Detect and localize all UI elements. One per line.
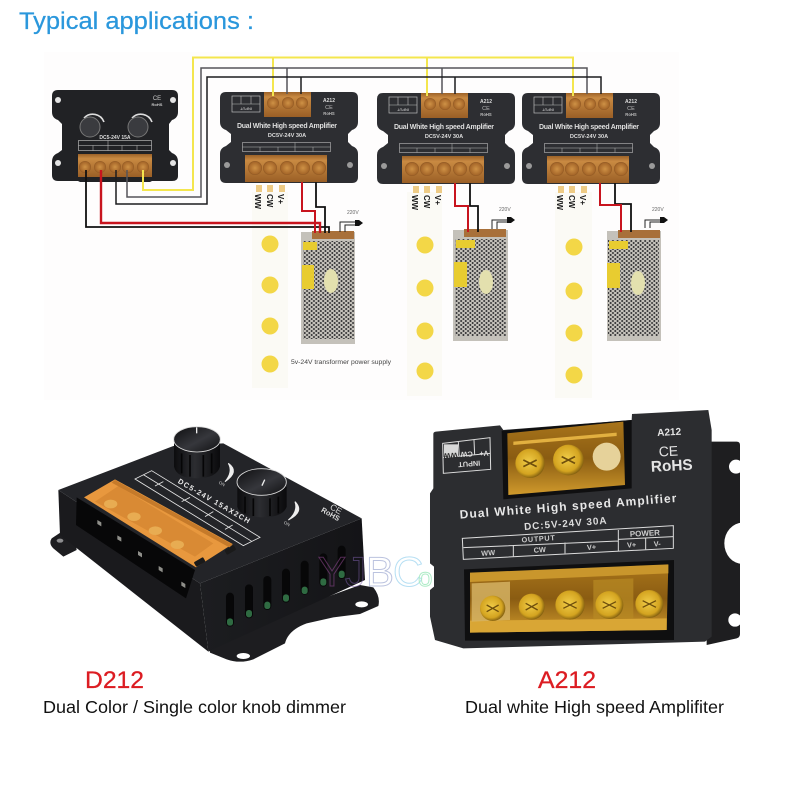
A212 amplifier 1: RoHS <box>323 111 335 116</box>
right mounting flange <box>707 442 761 645</box>
power wires <box>86 170 631 233</box>
D212 dimmer, small: RoHS <box>152 102 163 107</box>
power supply label: 5v-24V transformer power supply <box>291 359 392 366</box>
power supply 1: 220V <box>347 210 359 216</box>
A212 amplifier 1: DC5V-24V 30A <box>268 133 306 139</box>
rating marks <box>218 463 344 527</box>
model and marks: CE <box>658 443 679 460</box>
output and power table: V+ <box>587 542 596 552</box>
rating marks: CE <box>328 502 344 517</box>
voltage rating: DC:5V-24V 30A <box>524 516 607 533</box>
wiring diagram <box>44 52 679 400</box>
knob 1 <box>174 427 220 478</box>
LED strip 3 <box>555 192 592 398</box>
watermark: J <box>345 548 366 595</box>
model and marks: RoHS <box>650 457 693 476</box>
output and power table: OUTPUT <box>521 533 556 544</box>
watermark: ° <box>436 546 445 571</box>
A212 caption: Dual white High speed Amplifiter <box>465 697 724 717</box>
output terminal recess <box>464 560 674 641</box>
model and marks: A212 <box>657 427 682 439</box>
spec table <box>135 471 260 546</box>
rating marks: RoHS <box>320 505 342 523</box>
output and power table: V+ <box>627 540 636 550</box>
A212 amplifier 3: RoHS <box>625 112 637 117</box>
terminal block <box>76 497 195 598</box>
right face <box>200 518 365 652</box>
LED strip 2 <box>407 192 442 396</box>
A212 amplifier 3: INPUT <box>541 108 554 112</box>
body <box>430 410 712 648</box>
A212 amplifier 2 <box>377 93 515 211</box>
A212 amplifier 2: RoHS <box>480 112 492 117</box>
watermark: o <box>418 562 432 592</box>
A212 amplifier 2: A212 <box>480 99 492 105</box>
output and power table: V- <box>654 539 661 549</box>
A212 amplifier 3: WW <box>555 195 564 211</box>
output and power table: WW <box>481 548 495 558</box>
power supply 1 <box>301 210 363 344</box>
A212 amplifier 1: CE <box>325 105 333 111</box>
A212 amplifier 2: INPUT <box>396 108 409 112</box>
watermark: C <box>393 548 423 595</box>
input table: WW <box>443 451 458 460</box>
A212 amplifier 1: A212 <box>323 98 335 104</box>
power supply 2: 220V <box>499 207 511 213</box>
panel background <box>44 52 679 400</box>
watermark: Y <box>318 548 346 595</box>
input terminal recess <box>502 420 632 499</box>
A212 amplifier 2: Dual White High speed Amplifier <box>394 124 494 131</box>
A212 amplifier 1: INPUT <box>239 106 252 112</box>
input terminal cover <box>507 422 625 495</box>
input table: INPUT <box>457 459 480 469</box>
A212 amplifier 1 <box>220 92 358 210</box>
D212 dimmer, small: DC5-24V 15A <box>99 135 131 141</box>
top face <box>58 443 362 583</box>
A212 amplifier 3 <box>522 93 660 211</box>
input table <box>443 438 491 473</box>
A212 amplifier 3: Dual White High speed Amplifier <box>539 124 639 131</box>
A212 amplifier 1: Dual White High speed Amplifier <box>237 123 337 130</box>
D212 caption: Dual Color / Single color knob dimmer <box>43 697 346 717</box>
power supply 3: 220V <box>652 207 664 213</box>
rating marks: ON <box>283 520 291 527</box>
A212 amplifier 3: A212 <box>625 99 637 105</box>
orange cover <box>84 479 233 567</box>
A212 amplifier 3: CE <box>627 106 635 112</box>
model and marks <box>650 427 693 476</box>
vent slots <box>226 546 346 627</box>
output and power table <box>462 526 673 559</box>
A212 amplifier 2: DC5V-24V 30A <box>425 134 463 140</box>
A212 amplifier 3: V+ <box>578 195 587 205</box>
A212 amplifier 3: DC5V-24V 30A <box>570 134 608 140</box>
A212 amplifier 2: WW <box>410 195 419 211</box>
D212 dimmer, small: CE <box>153 96 161 102</box>
A212 amplifier 1: CW <box>265 194 274 208</box>
product photo: D212 dimmer <box>50 427 379 662</box>
input table: CW <box>460 449 473 459</box>
product photo: A212 amplifier <box>430 410 761 648</box>
LED strip 1 <box>252 192 288 388</box>
knob 2 <box>237 469 287 517</box>
title: Typical applications : <box>19 8 254 35</box>
control signal wires <box>116 58 601 204</box>
watermark: B <box>366 548 394 595</box>
A212 amplifier 3: CW <box>567 195 576 209</box>
D212 label: D212 <box>85 667 144 694</box>
A212 amplifier 2: CW <box>422 195 431 209</box>
product heading: Dual White High speed Amplifier <box>459 491 677 522</box>
D212 dimmer, small <box>52 90 178 182</box>
output and power table: CW <box>533 545 546 555</box>
left face <box>58 490 208 652</box>
output and power table: POWER <box>630 528 660 539</box>
output terminal cover <box>470 565 668 633</box>
output screws <box>480 590 663 621</box>
A212 amplifier 1: WW <box>253 194 262 210</box>
A212 label: A212 <box>538 667 596 694</box>
A212 amplifier 2: V+ <box>433 195 442 205</box>
A212 amplifier 2: CE <box>482 106 490 112</box>
rating marks: ON <box>218 480 226 487</box>
power supply 3 <box>607 207 668 341</box>
mounting flanges <box>50 527 379 662</box>
input table: V+ <box>479 449 489 458</box>
A212 amplifier 1: V+ <box>276 194 285 204</box>
watermark <box>318 546 445 595</box>
power supply 2 <box>453 207 515 341</box>
model text: DC5-24V 15AX2CH <box>176 477 252 525</box>
